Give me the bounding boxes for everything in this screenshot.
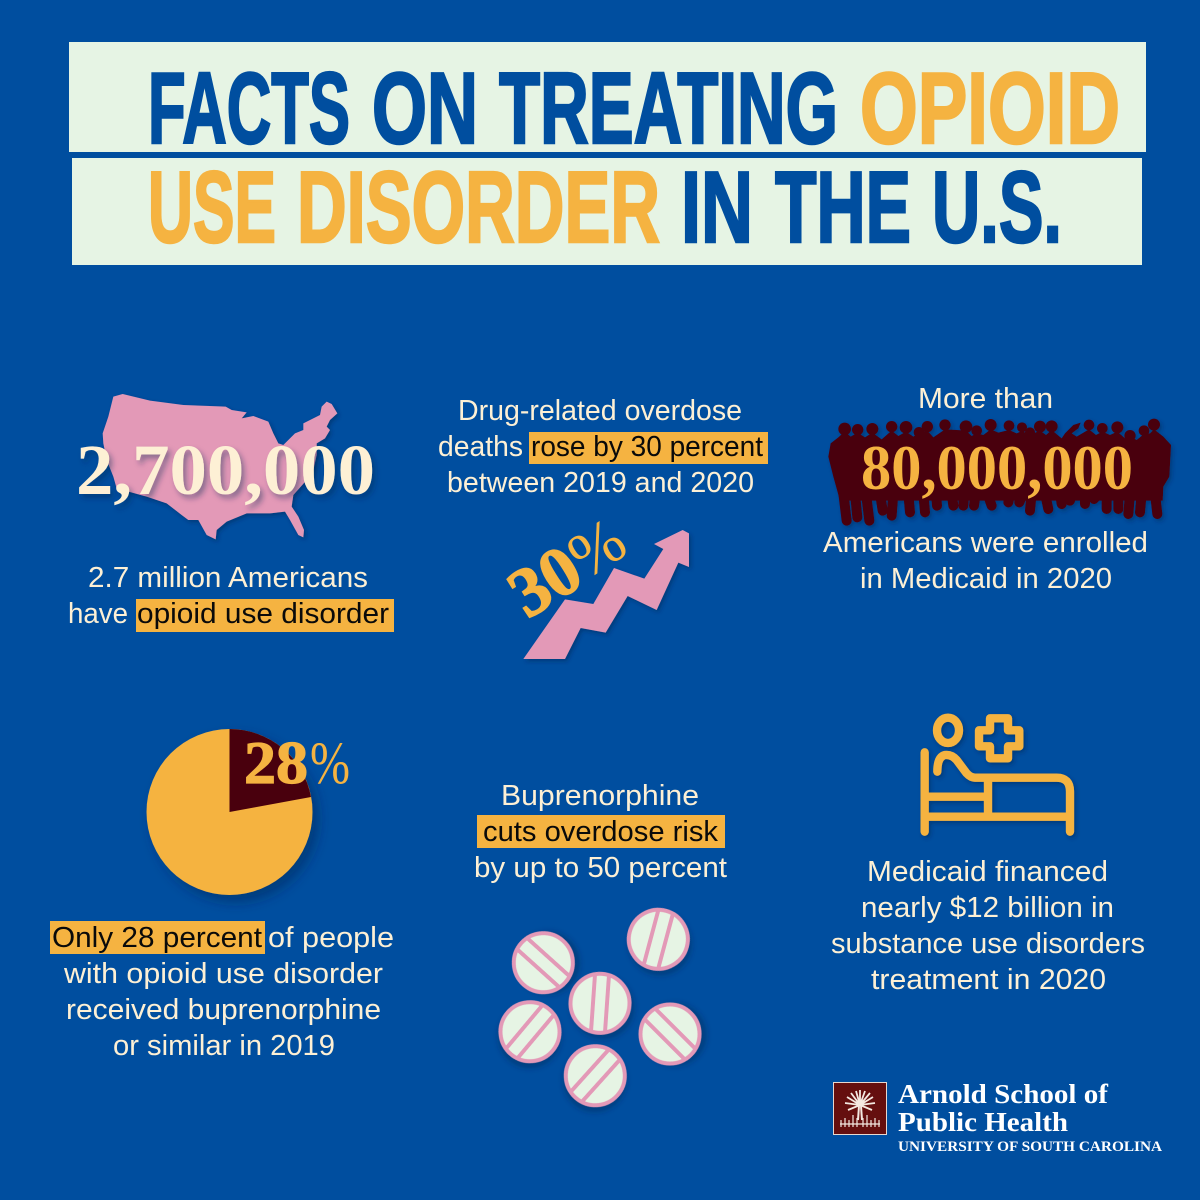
caption: deaths xyxy=(438,431,523,463)
icon: hospital bed xyxy=(925,718,1070,832)
big number: 80,000,000 xyxy=(861,432,1133,503)
title xyxy=(69,42,1146,265)
caption xyxy=(50,921,394,1062)
caption: opioid use disorder xyxy=(137,598,389,630)
title: ON xyxy=(372,53,478,165)
text: more than: More than xyxy=(918,383,1053,415)
panel: Medicaid financing xyxy=(831,718,1145,996)
icon: US map xyxy=(103,394,337,539)
caption: or similar in 2019 xyxy=(113,1030,335,1062)
title: THE xyxy=(775,152,911,264)
icon: rising arrow xyxy=(523,530,689,659)
caption xyxy=(474,780,727,884)
title: IN xyxy=(681,152,753,264)
title: DISORDER xyxy=(297,152,660,264)
caption: Americans were enrolled xyxy=(823,527,1148,559)
caption: of people xyxy=(268,922,394,954)
caption: between 2019 and 2020 xyxy=(447,467,754,499)
title: U.S. xyxy=(932,152,1062,264)
stat: 30 percent xyxy=(495,504,638,633)
icon: crowd silhouette xyxy=(828,419,1171,521)
title: USE xyxy=(148,152,276,264)
panel: Medicaid enrollment xyxy=(823,383,1171,595)
panel: overdose risk xyxy=(474,780,727,1117)
caption: treatment in 2020 xyxy=(871,964,1106,996)
pie chart xyxy=(146,729,312,895)
caption: with opioid use disorder xyxy=(63,958,383,990)
panel: buprenorphine access xyxy=(50,729,394,1062)
title: TREATING xyxy=(499,53,838,165)
stat: 28 percent xyxy=(244,730,350,796)
logo: Arnold School of Public Health: Public Health xyxy=(898,1107,1068,1137)
title: FACTS xyxy=(148,53,350,165)
big number: 2,700,000 xyxy=(76,430,375,510)
stat: 30 percent: % xyxy=(555,504,638,592)
caption: cuts overdose risk xyxy=(483,816,718,848)
caption: have xyxy=(68,598,128,630)
stat: 30 percent: 30 xyxy=(495,531,595,633)
caption: rose by 30 percent xyxy=(531,431,763,463)
caption: in Medicaid in 2020 xyxy=(860,563,1112,595)
caption: Only 28 percent xyxy=(52,922,262,954)
caption: received buprenorphine xyxy=(66,994,381,1026)
logo: Arnold School of Public Health xyxy=(834,1079,1162,1155)
caption xyxy=(823,527,1148,595)
stat: 28 percent: % xyxy=(310,730,350,796)
panel: opioid use disorder prevalence xyxy=(68,394,394,632)
caption xyxy=(831,856,1145,996)
caption: substance use disorders xyxy=(831,928,1145,960)
caption: Drug-related overdose xyxy=(458,395,742,427)
caption xyxy=(438,395,768,499)
caption xyxy=(68,562,394,632)
icon: pills xyxy=(488,903,712,1117)
logo: Arnold School of Public Health: UNIVERSITY OF SOUTH CAROLINA xyxy=(898,1139,1162,1155)
caption: 2.7 million Americans xyxy=(88,562,368,594)
caption: Buprenorphine xyxy=(501,780,699,812)
school name: Arnold School of xyxy=(898,1079,1109,1109)
stat: 28 percent: 28 xyxy=(244,730,308,796)
caption: nearly $12 billion in xyxy=(861,892,1114,924)
caption: Medicaid financed xyxy=(867,856,1108,888)
panel: overdose deaths xyxy=(438,395,768,659)
icon: palmetto emblem xyxy=(834,1082,886,1134)
caption: by up to 50 percent xyxy=(474,852,727,884)
